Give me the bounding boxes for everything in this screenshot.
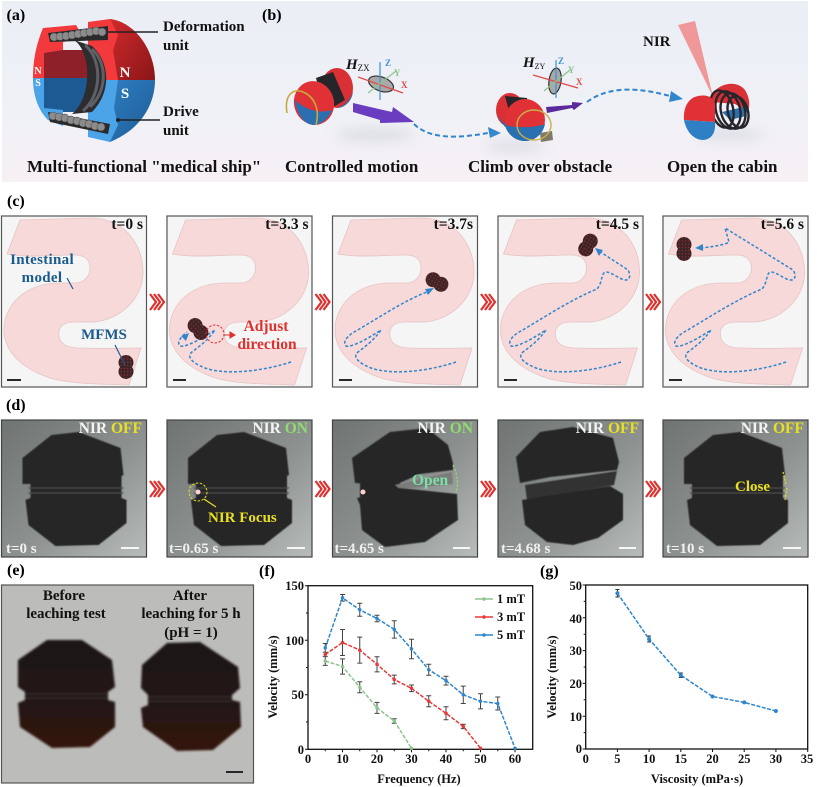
panel c: t=4.5 s (498, 216, 643, 387)
chart f: velocity vs frequency: 50 (474, 752, 487, 766)
capsule: controlled motion (286, 68, 415, 142)
series 5 mT (325, 598, 515, 748)
label: HZX: ZX (358, 63, 370, 73)
panel c: t=3.7 s (332, 216, 478, 387)
axes: ZX: Y (394, 68, 401, 78)
capsule: open cabin (684, 84, 765, 141)
chevrons c1 (150, 294, 164, 310)
capsule: climb over obstacle (485, 93, 553, 152)
panel c: t=0 s: t=0 s (111, 216, 143, 233)
label: drive unit: Drive (163, 104, 199, 120)
panel d: t=4.65 s: Open (412, 472, 449, 489)
label: HZX: H (346, 57, 358, 73)
panel d: t=10 s (663, 420, 808, 557)
chart g: velocity vs viscosity (545, 579, 813, 786)
chart g: velocity vs viscosity: 30 (570, 644, 582, 658)
chart g: velocity vs viscosity: 40 (570, 612, 582, 626)
label: drive unit: unit (163, 123, 189, 139)
panel c: t=0 s: Intestinal (10, 252, 74, 268)
panel c: t=3.3 s (167, 216, 312, 387)
chevrons c2 (316, 294, 330, 310)
chart f: velocity vs frequency: 60 (509, 752, 521, 766)
chart g: velocity vs viscosity: 0 (583, 752, 589, 766)
panel label g: (g) (540, 563, 559, 580)
arrow: dashed path to obstacle (414, 124, 501, 138)
panel d: t=10 s: Close (735, 479, 770, 495)
chart f: velocity vs frequency: 30 (405, 752, 418, 766)
chart f: velocity vs frequency (266, 579, 533, 786)
axes: ZY: X (576, 77, 583, 87)
label: HZY: ZY (535, 62, 546, 71)
axes: ZX: X (401, 80, 408, 90)
caption: controlled motion: Controlled motion (285, 157, 419, 176)
chart g: velocity vs viscosity: 25 (738, 752, 750, 766)
label: deformation unit: Deformation (163, 19, 245, 35)
panel e: leaching photo: leaching test (26, 606, 106, 622)
series 1 mT (325, 661, 412, 748)
chevrons c3 (481, 294, 495, 310)
markers (325, 598, 515, 748)
N and S pole labels: S (121, 86, 129, 102)
chart g: velocity vs viscosity: 35 (801, 752, 813, 766)
panel c: t=3.3 s: direction (237, 336, 297, 353)
panel c: t=3.3 s: t=3.3 s (265, 216, 308, 233)
chart f: velocity vs frequency: 40 (440, 752, 452, 766)
legend f: 3 mT (497, 610, 526, 624)
chart g: velocity vs viscosity: 20 (570, 677, 582, 691)
legend f: 5 mT (497, 628, 526, 642)
label: NIR: NIR (643, 34, 671, 50)
N and S pole labels: N (120, 65, 131, 81)
error bars f (323, 594, 500, 729)
beam: NIR (678, 21, 713, 97)
label: deformation unit: unit (163, 38, 189, 54)
panel d: t=10 s: NIR OFF (741, 420, 804, 437)
panel d: t=0 s: NIR OFF (79, 420, 142, 437)
axes: ZY (533, 56, 583, 98)
caption a: Multi-functional "medical ship" (27, 157, 261, 176)
axes: ZY: Y (568, 65, 575, 75)
error bars g (615, 590, 683, 678)
panel label a: (a) (6, 7, 25, 24)
chart g: velocity vs viscosity: 30 (770, 752, 782, 766)
panel d: t=4.68 s (498, 420, 643, 557)
chevrons d3 (481, 481, 495, 497)
chart f: velocity vs frequency: Velocity (mm/s) (266, 635, 280, 719)
N and S pole labels: N (34, 66, 42, 77)
panel label b: (b) (262, 7, 282, 24)
legend f: 1 mT (497, 592, 526, 606)
panel c: t=5.6 s: t=5.6 s (761, 216, 804, 233)
panel c: t=3.3 s: Adjust (244, 318, 289, 335)
chevrons d4 (646, 481, 660, 497)
chart f: velocity vs frequency: 100 (285, 634, 304, 648)
leader: drive unit (116, 118, 160, 122)
series g (617, 593, 776, 711)
arrow: purple small (546, 102, 583, 113)
legend f (475, 592, 526, 642)
panel label c: (c) (7, 193, 25, 210)
chart f: velocity vs frequency: 20 (371, 752, 383, 766)
panel d: t=4.68 s: NIR OFF (576, 420, 639, 437)
panel c: t=0 s: MFMS (81, 327, 127, 343)
chart g: velocity vs viscosity: 10 (643, 752, 655, 766)
panel c: t=5.6 s (663, 216, 808, 387)
axes: ZX (358, 58, 408, 100)
chart g: velocity vs viscosity: 5 (614, 752, 621, 766)
leader: deformation unit (107, 31, 158, 33)
panel e: leaching photo (2, 585, 254, 783)
panel label d: (d) (6, 397, 26, 414)
panel d: t=10 s: t=10 s (666, 541, 704, 557)
caption: climb over obstacle: Climb over obstacle (468, 157, 613, 176)
series 3 mT (325, 642, 480, 748)
N and S pole labels: S (35, 78, 41, 89)
panel d: t=0.65 s (167, 420, 312, 557)
arrow: dashed path to cabin (587, 90, 683, 102)
chart g: velocity vs viscosity: 10 (570, 710, 582, 724)
panel: a and b background (2, 1, 808, 182)
panel e: leaching photo: After (173, 588, 207, 604)
panel label f: (f) (259, 563, 275, 580)
chart f: velocity vs frequency: Frequency (Hz) (377, 772, 461, 786)
arrow: purple motion (353, 103, 414, 123)
panel d: t=0 s (2, 420, 146, 557)
panel c: t=4.5 s: t=4.5 s (596, 216, 639, 233)
panel c: t=3.7 s: t=3.7s (434, 216, 473, 233)
chart g: velocity vs viscosity: Velocity (mm/s) (545, 635, 559, 719)
panel d: t=4.65 s: t=4.65 s (334, 541, 384, 557)
panel e: leaching photo: Before (43, 588, 85, 604)
axes: ZY: Z (558, 56, 564, 66)
chart f: velocity vs frequency: 0 (305, 752, 311, 766)
panel c: t=0 s: model (22, 270, 62, 286)
cutaway capsule illustration (33, 19, 155, 142)
chart g: velocity vs viscosity: 15 (675, 752, 687, 766)
chart g: velocity vs viscosity: 20 (706, 752, 719, 766)
chart g: velocity vs viscosity: 0 (576, 742, 582, 756)
panel e: leaching photo: leaching for 5 h (141, 606, 241, 622)
chart g: velocity vs viscosity: 50 (570, 579, 582, 593)
panel d: t=0.65 s: NIR Focus (208, 510, 277, 526)
panel e: leaching photo: (pH = 1) (164, 625, 218, 641)
caption: open the cabin: Open the cabin (667, 157, 778, 176)
chart g: velocity vs viscosity: Viscosity (mPa·s) (651, 772, 743, 786)
chevrons d2 (316, 481, 330, 497)
axes: ZX: Z (385, 58, 391, 68)
panel d: t=0.65 s: t=0.65 s (169, 541, 219, 557)
chevrons d1 (150, 481, 164, 497)
chart f: velocity vs frequency: 10 (336, 752, 349, 766)
N and S pole labels (34, 65, 131, 102)
panel d: t=0 s: t=0 s (6, 541, 37, 557)
panel c: t=0 s (2, 216, 146, 387)
panel d: t=4.68 s: t=4.68 s (501, 541, 551, 557)
panel d: t=0.65 s: NIR ON (252, 420, 308, 437)
chart f: velocity vs frequency: 50 (292, 688, 304, 702)
chevrons c4 (646, 294, 660, 310)
panel label e: (e) (7, 562, 25, 579)
panel d: t=4.65 s: NIR ON (417, 420, 473, 437)
label: HZY: H (523, 55, 535, 71)
chart f: velocity vs frequency: 150 (285, 579, 304, 593)
panel d: t=4.65 s (332, 420, 478, 557)
chart f: velocity vs frequency: 0 (298, 743, 304, 757)
